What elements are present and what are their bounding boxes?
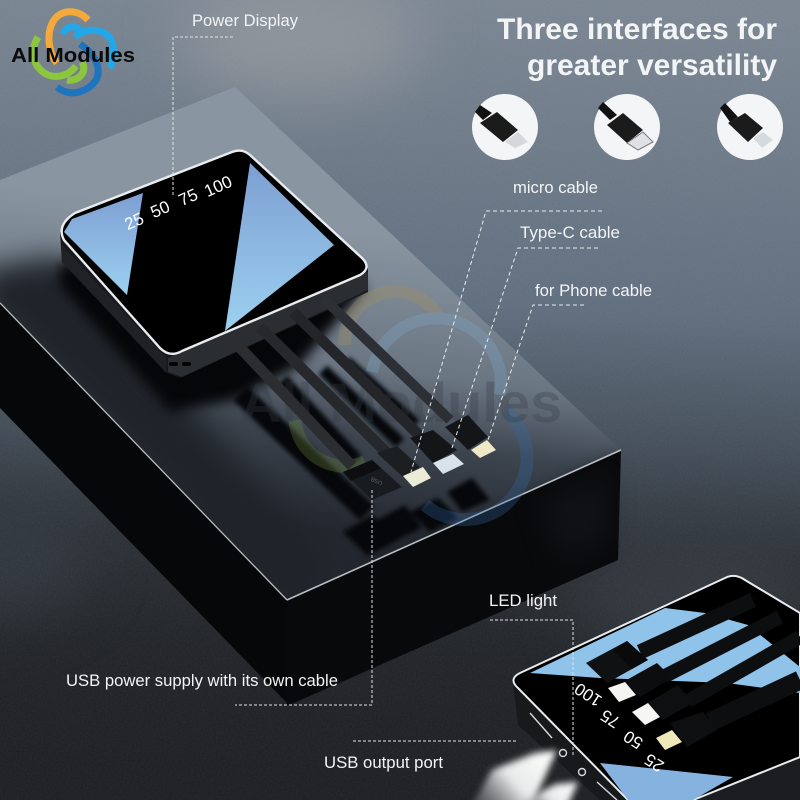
retractable cables [230,298,496,500]
icon: lightning connector [472,94,538,160]
vents [169,362,191,366]
watermark: faint rings and name: All Modules [240,371,562,434]
logo: All Modules [11,12,135,93]
battery level digits [122,172,235,234]
digits: 100 [571,679,605,710]
light blue arc [63,27,114,68]
icon: micro connector [717,94,783,160]
digits: 50 [620,726,646,753]
logo: All Modules: All Modules [11,45,135,67]
heading [497,13,777,82]
callout: LED light [489,592,573,757]
black block: side faces [0,303,621,706]
cable 1 with USB plug: USB [370,475,384,486]
cable 1 with USB plug [230,337,402,500]
power bank screen [62,151,367,354]
callout: micro cable [411,179,602,472]
callout: power display [173,12,299,195]
callout: for Phone cable [488,282,652,440]
digits: 75 [597,705,623,732]
callout: USB output port: USB output port [324,754,443,772]
orange arc [49,12,88,63]
callout: power display: Power Display [192,12,299,30]
power bank body [60,232,368,378]
watermark: faint rings and name [240,292,562,520]
reflection of power bank [58,262,368,412]
digits [571,679,667,776]
body [513,682,630,800]
blue panels [530,608,800,800]
battery level digits: 25 [122,209,147,234]
cable 4 with lightning plug [323,298,496,458]
callout: micro cable: micro cable [513,179,598,197]
cable plugs [586,600,800,750]
LED beams [470,750,578,800]
battery level digits: 50 [148,197,173,222]
reflections of cables [240,360,417,513]
callout: USB power supply: USB power supply with its own cable [66,672,338,690]
callout: USB power supply [66,490,372,705]
callout: for Phone cable: for Phone cable [535,282,652,300]
cable 3 with Type-C plug [293,312,464,474]
dark wash on the left of the top face [0,239,267,510]
digits: 25 [641,749,667,776]
battery level digits: 100 [201,172,235,201]
callout: Type-C cable: Type-C cable [520,224,620,242]
dark blue arc [57,44,98,93]
green arc [33,37,84,80]
heading: Three interfaces for [497,13,777,46]
cable 2 with micro plug [260,327,431,487]
block bevel lines [0,303,621,600]
lower-right power bank [470,576,800,800]
blue reflections on screen [64,193,143,295]
ports [530,713,617,800]
callout: LED light: LED light [489,592,557,610]
battery level digits: 75 [176,185,201,210]
callout: Type-C cable [452,224,620,448]
main power bank [60,151,368,378]
block top face with reflections [0,87,621,620]
heading: greater versatility [527,49,777,82]
icon: Type-C connector [594,94,660,160]
screen [513,576,800,800]
